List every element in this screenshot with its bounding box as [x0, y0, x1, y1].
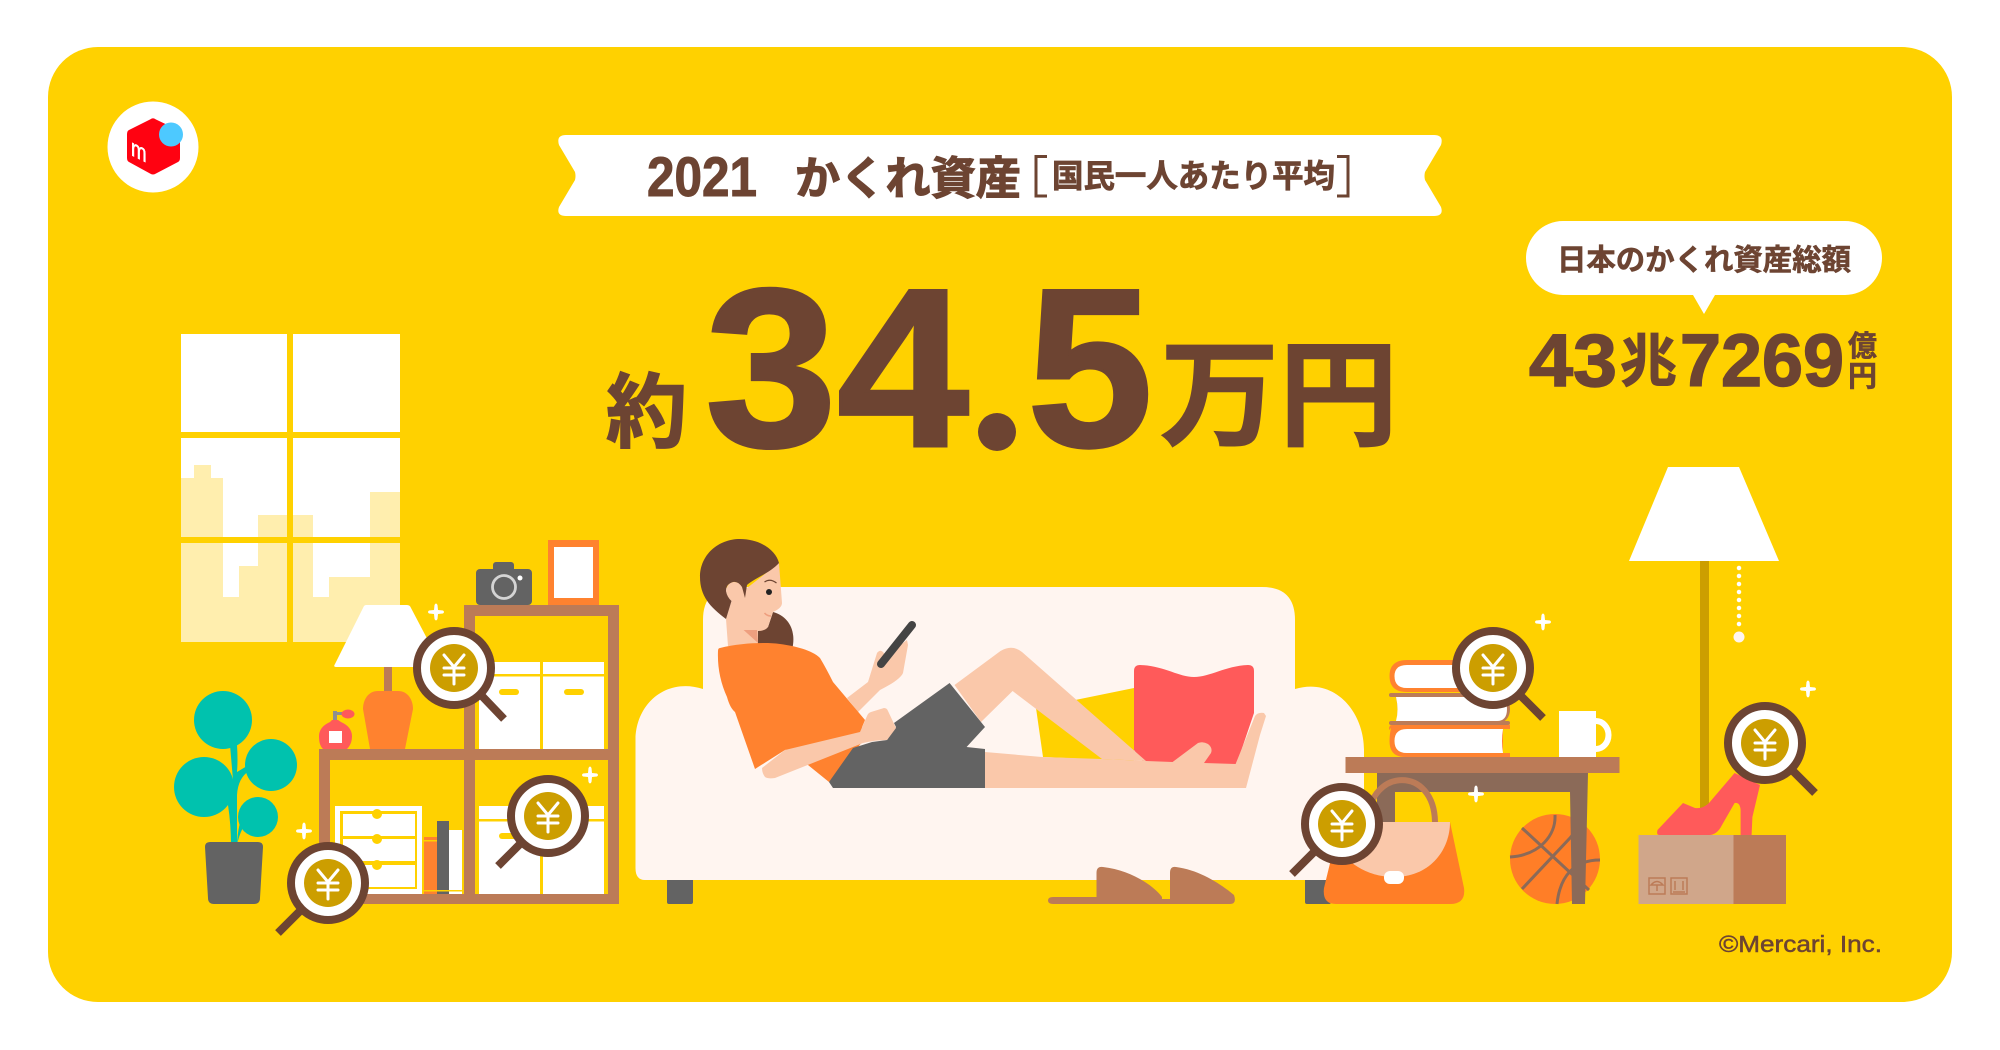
- bookshelf: [319, 605, 619, 904]
- storage boxes upper: [479, 662, 604, 749]
- eye: [766, 589, 772, 595]
- number 34.5: 5: [1027, 241, 1153, 494]
- number 34.5: .: [972, 282, 1022, 484]
- mug: [1559, 711, 1608, 757]
- camera: [476, 562, 532, 605]
- copyright: ©Mercari, Inc.: [1719, 931, 1882, 957]
- title: year: 2021: [647, 145, 757, 208]
- yellow cushion: [1036, 688, 1134, 761]
- neck and face: [726, 563, 782, 646]
- storage boxes lower: [479, 806, 604, 894]
- callout: total hidden assets: [1526, 221, 1882, 314]
- shelf books: [424, 821, 462, 894]
- title: right bracket: [1337, 156, 1348, 196]
- phone: [881, 625, 912, 664]
- callout text: 日本のかくれ資産総額: [1557, 244, 1851, 277]
- hair: [700, 539, 779, 619]
- unit 億: 億: [1848, 330, 1877, 363]
- magnifier with yen coin 3: [278, 846, 365, 933]
- title: left bracket: [1036, 156, 1047, 196]
- mouth: [764, 613, 771, 616]
- person lying on sofa with phone: [700, 539, 1266, 788]
- side table: [1346, 757, 1620, 904]
- label: 約: 約: [606, 369, 687, 459]
- title ribbon: [558, 135, 1442, 216]
- shirt: [718, 643, 865, 769]
- high heel shoe: [1657, 773, 1760, 835]
- digits 7269: 7269: [1680, 319, 1844, 402]
- table lamp: [334, 605, 442, 749]
- window with city view: [181, 334, 400, 642]
- shelf frame: [319, 605, 619, 904]
- unit 兆: 兆: [1620, 330, 1677, 394]
- floor lamp: [1629, 467, 1779, 810]
- digits 43: 43: [1529, 319, 1617, 402]
- cardboard box: [1638, 835, 1786, 904]
- sparkles: [296, 604, 1816, 840]
- table books: [1389, 660, 1510, 757]
- shirt lower hem: [785, 725, 868, 782]
- magnifier with yen coin 1: [417, 631, 504, 719]
- handbag: [1324, 780, 1464, 904]
- total value: 43兆7269億円: [1529, 319, 1877, 402]
- box care marks: [1649, 878, 1687, 894]
- title: かくれ資産: かくれ資産: [795, 153, 1021, 204]
- basketball: [1510, 814, 1600, 904]
- hair bun: [757, 612, 793, 650]
- shorts: [829, 683, 985, 788]
- perfume bottle: [319, 710, 354, 749]
- magnifier with yen coin 5: [1728, 706, 1815, 793]
- photo frame: [548, 540, 599, 605]
- unit: 万円: 万円: [1160, 331, 1398, 461]
- magnifier with yen coin 2: [498, 779, 585, 866]
- near arm: [762, 708, 896, 778]
- main figure: about 345,000 yen: [606, 241, 1398, 494]
- number 34.5: [705, 241, 1153, 494]
- thigh and raised knee: [954, 648, 1146, 761]
- number 34.5: 34: [705, 241, 969, 494]
- magnifier with yen coin 4: [1456, 631, 1543, 718]
- icon: mercari logo: [108, 102, 198, 192]
- neck shadow: [744, 630, 758, 643]
- far arm: [847, 640, 908, 712]
- title: per capita: 国民一人あたり平均: [1052, 158, 1335, 194]
- magnifier with yen coin 6: [1292, 787, 1379, 874]
- plant pot: [205, 842, 263, 904]
- sofa: [636, 587, 1364, 904]
- drawer unit: [335, 806, 422, 894]
- lamp pull cord: [1737, 568, 1741, 628]
- unit 円: 円: [1848, 361, 1877, 393]
- icon: mercari logo: m: [131, 134, 147, 168]
- lower leg and foot: [985, 713, 1266, 788]
- slippers: [1048, 867, 1235, 904]
- red cushion: [1134, 665, 1254, 766]
- eyebrow: [764, 580, 776, 583]
- plant: [174, 691, 297, 904]
